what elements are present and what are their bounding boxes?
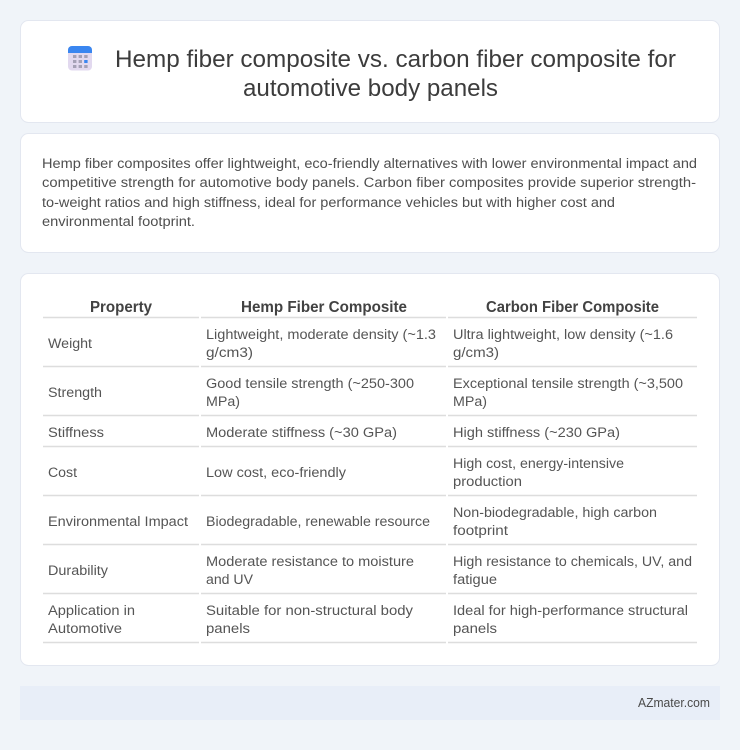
row: environmental impact: Environmental Impact <box>48 514 188 530</box>
title <box>115 46 676 102</box>
row: strength: Exceptional tensile strength (~3,500 <box>453 376 683 392</box>
title: Hemp fiber composite vs. carbon fiber composite for <box>115 46 676 73</box>
row: durability: fatigue <box>453 572 497 588</box>
row: durability: Moderate resistance to moisture <box>206 554 414 570</box>
summary text: environmental footprint. <box>42 214 195 230</box>
summary text: to-weight ratios and high stiffness, ideal for performance vehicles but with higher cost and <box>42 195 615 211</box>
row: environmental impact <box>48 505 657 539</box>
row: weight: Ultra lightweight, low density (~1.6 <box>453 327 673 343</box>
row: cost <box>48 456 624 490</box>
row: application in automotive: Suitable for non-structural body <box>206 603 414 619</box>
row: application in automotive <box>48 603 688 637</box>
row: durability: and UV <box>206 572 254 588</box>
row: stiffness: Stiffness <box>48 425 104 441</box>
summary text <box>42 156 697 230</box>
row: environmental impact: Non-biodegradable, high carbon <box>453 505 657 521</box>
row: strength: MPa) <box>206 394 240 410</box>
row: stiffness <box>48 425 620 441</box>
row: stiffness: Moderate stiffness (~30 GPa) <box>206 425 397 441</box>
row: durability <box>48 554 692 588</box>
row: weight: Weight <box>48 336 92 352</box>
table header <box>90 299 659 316</box>
title: automotive body panels <box>243 75 498 102</box>
row: environmental impact: footprint <box>453 523 508 539</box>
row: stiffness: High stiffness (~230 GPa) <box>453 425 620 441</box>
row: weight: Lightweight, moderate density (~1.3 <box>206 327 436 343</box>
summary text: Hemp fiber composites offer lightweight, eco-friendly alternatives with lower environmental impact and <box>42 156 697 172</box>
row: strength: Good tensile strength (~250-300 <box>206 376 414 392</box>
footer <box>20 686 720 720</box>
panel: title card <box>20 20 720 122</box>
row: cost: Low cost, eco-friendly <box>206 465 347 481</box>
row: durability: High resistance to chemicals, UV, and <box>453 554 692 570</box>
row: strength <box>48 376 683 410</box>
row: cost: Cost <box>48 465 77 481</box>
row: weight: g/cm3) <box>206 345 253 361</box>
row: application in automotive: Automotive <box>48 621 122 637</box>
row: strength: MPa) <box>453 394 487 410</box>
icon: calendar <box>68 46 92 70</box>
row: application in automotive: panels <box>453 621 497 637</box>
row: weight: g/cm3) <box>453 345 499 361</box>
row: application in automotive: Application in <box>48 603 135 619</box>
row: application in automotive: Ideal for high-performance structural <box>453 603 688 619</box>
row: cost: production <box>453 474 522 490</box>
row: durability: Durability <box>48 563 109 579</box>
panel: comparison table <box>20 274 720 666</box>
table header: Carbon Fiber Composite <box>486 299 659 316</box>
summary text: competitive strength for automotive body panels. Carbon fiber composites provide superior strength- <box>42 175 696 191</box>
row: cost: High cost, energy-intensive <box>453 456 624 472</box>
row: environmental impact: Biodegradable, renewable resource <box>206 514 430 530</box>
row: weight <box>48 327 673 361</box>
footer credit: AZmater.com <box>638 696 710 710</box>
table header: Hemp Fiber Composite <box>241 299 407 316</box>
table header: Property <box>90 299 152 316</box>
panel: summary <box>20 134 720 252</box>
row: strength: Strength <box>48 385 102 401</box>
row: application in automotive: panels <box>206 621 250 637</box>
